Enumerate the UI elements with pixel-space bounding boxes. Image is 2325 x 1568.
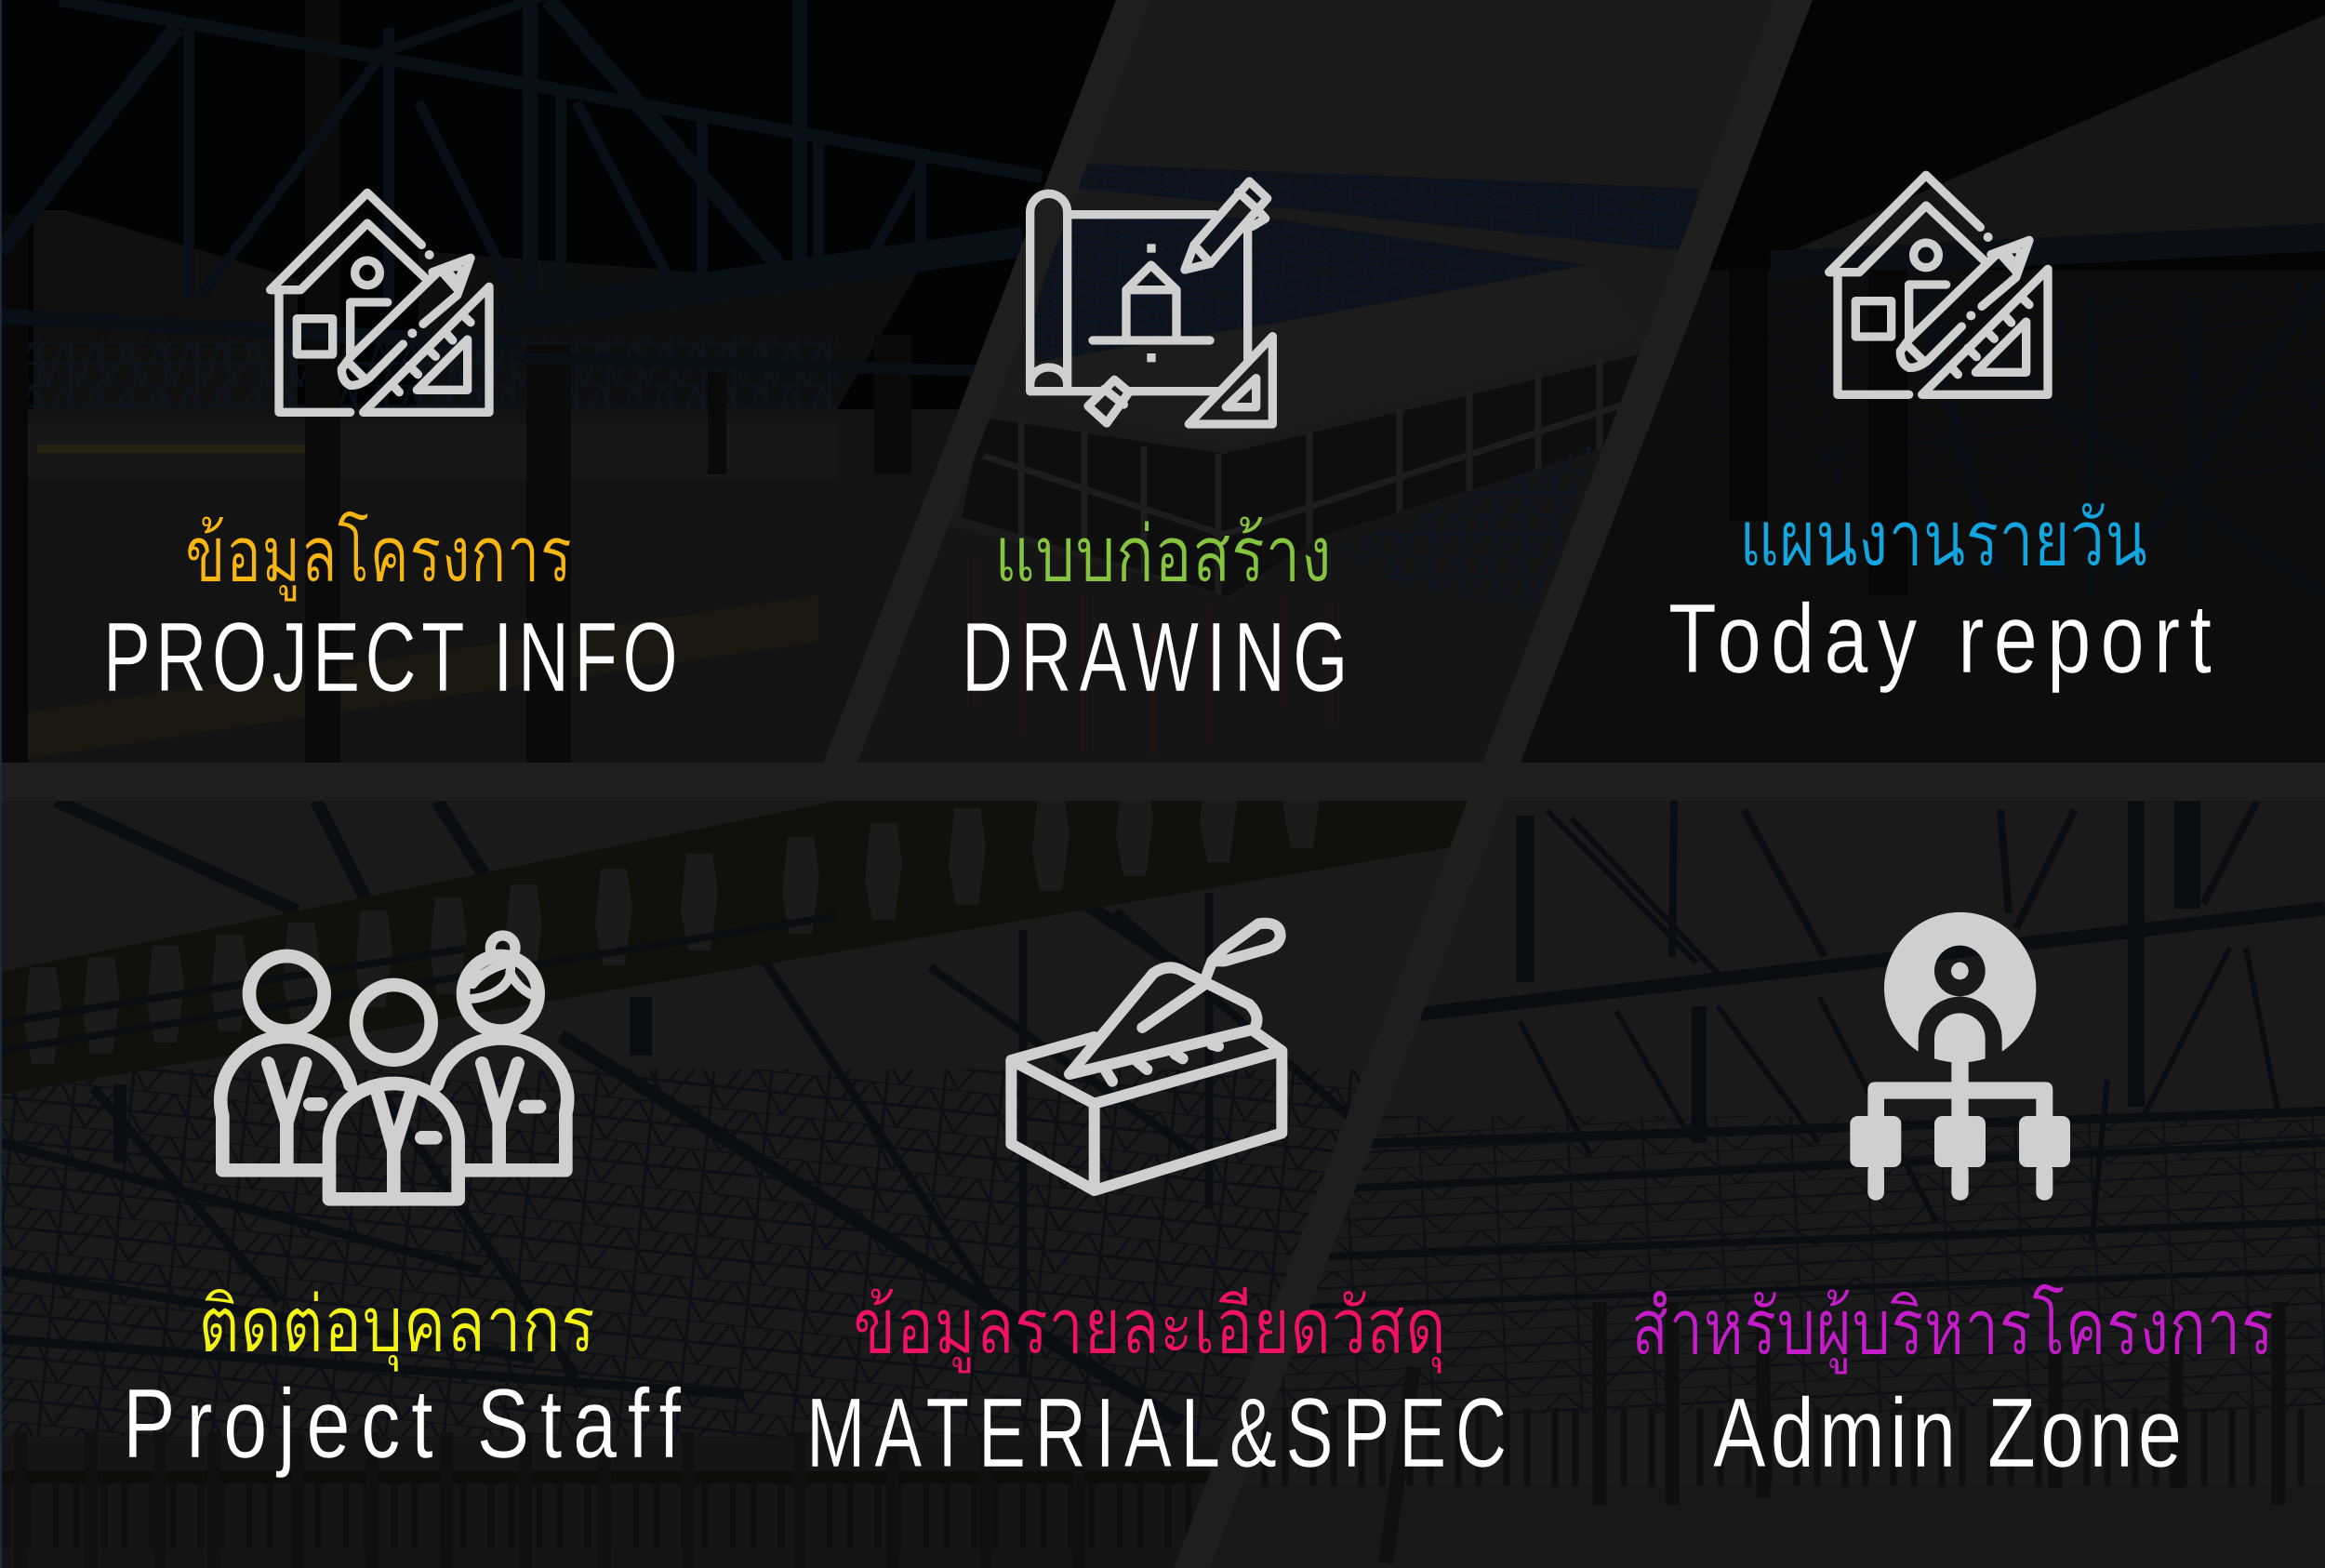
heading: Admin Zone: Admin Zone (1713, 1378, 2182, 1488)
thai heading: project info: ข้อมูลโครงการ (185, 511, 572, 602)
thai heading: contact staff: ติดต่อบุคลากร (198, 1281, 595, 1373)
thai heading: drawing: แบบก่อสร้าง (994, 511, 1332, 598)
panel: project staff (123, 936, 681, 1479)
panel: drawing (962, 181, 1348, 712)
panel background: top centre structural photo (857, 164, 1699, 763)
heading: DRAWING: DRAWING (962, 602, 1348, 712)
panel background: top left structural photo (0, 0, 1162, 763)
panel background: bottom right structural photo (1209, 801, 2325, 1568)
icon: administrator hierarchy (1850, 912, 2070, 1201)
icon: brick and trowel (1011, 924, 1282, 1190)
icon: house and drafting tools (271, 193, 489, 412)
panel background: bottom left structural photo (0, 751, 1488, 1568)
heading: Today report: Today report (1668, 584, 2212, 694)
thai heading: material details: ข้อมูลรายละเอียดวัสดุ (853, 1282, 1446, 1375)
icon: blueprint with pencil and set square (1030, 181, 1272, 424)
panel: project info (103, 193, 678, 712)
thai heading: daily plan: แผนงานรายวัน (1739, 495, 2147, 582)
icon: house and drafting tools (1829, 175, 2048, 394)
panel: material and spec (806, 924, 1507, 1488)
heading: MATERIAL&SPEC: MATERIAL&SPEC (806, 1377, 1507, 1488)
left edge line (0, 0, 2, 1568)
panel: admin zone (1631, 912, 2274, 1488)
heading: PROJECT INFO: PROJECT INFO (103, 602, 678, 712)
panel: today report (1668, 175, 2212, 694)
panel background: top right structural photo (1488, 0, 2325, 763)
icon: three staff members (220, 936, 567, 1199)
heading: Project Staff: Project Staff (123, 1369, 681, 1479)
